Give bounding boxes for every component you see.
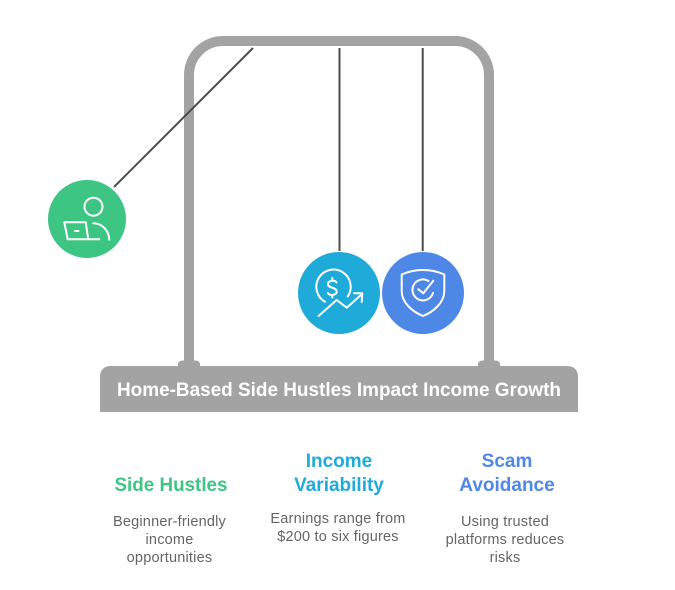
column: income variability: [270, 451, 406, 545]
icon: income variability dollar and growth arrow: [298, 252, 380, 334]
description: side hustles: income: [146, 532, 193, 548]
description: scam avoidance: Using trusted: [461, 514, 549, 530]
heading: scam avoidance: Scam: [482, 451, 532, 472]
heading: side hustles: Side Hustles: [114, 475, 228, 496]
heading: income variability: Income: [306, 451, 372, 472]
description: income variability: $200 to six figures: [277, 529, 399, 545]
column: scam avoidance: [446, 451, 564, 566]
description: side hustles: opportunities: [127, 550, 212, 566]
heading: scam avoidance: Avoidance: [459, 475, 555, 496]
description: scam avoidance: platforms reduces: [446, 532, 564, 548]
description: income variability: Earnings range from: [270, 511, 406, 527]
column: side hustles: [113, 475, 228, 566]
heading: income variability: Variability: [294, 475, 384, 496]
string: side hustles: [114, 48, 253, 187]
title: Home-Based Side Hustles Impact Income Growth: [117, 379, 561, 401]
string: scam avoidance: [422, 48, 424, 251]
cradle frame: [178, 41, 500, 366]
description: side hustles: Beginner-friendly: [113, 514, 227, 530]
string: income variability: [338, 48, 340, 251]
base bar with title: [100, 366, 578, 412]
icon: scam avoidance shield with check: [382, 252, 464, 334]
icon: side hustles person at laptop: [48, 180, 126, 258]
description: scam avoidance: risks: [490, 550, 520, 566]
